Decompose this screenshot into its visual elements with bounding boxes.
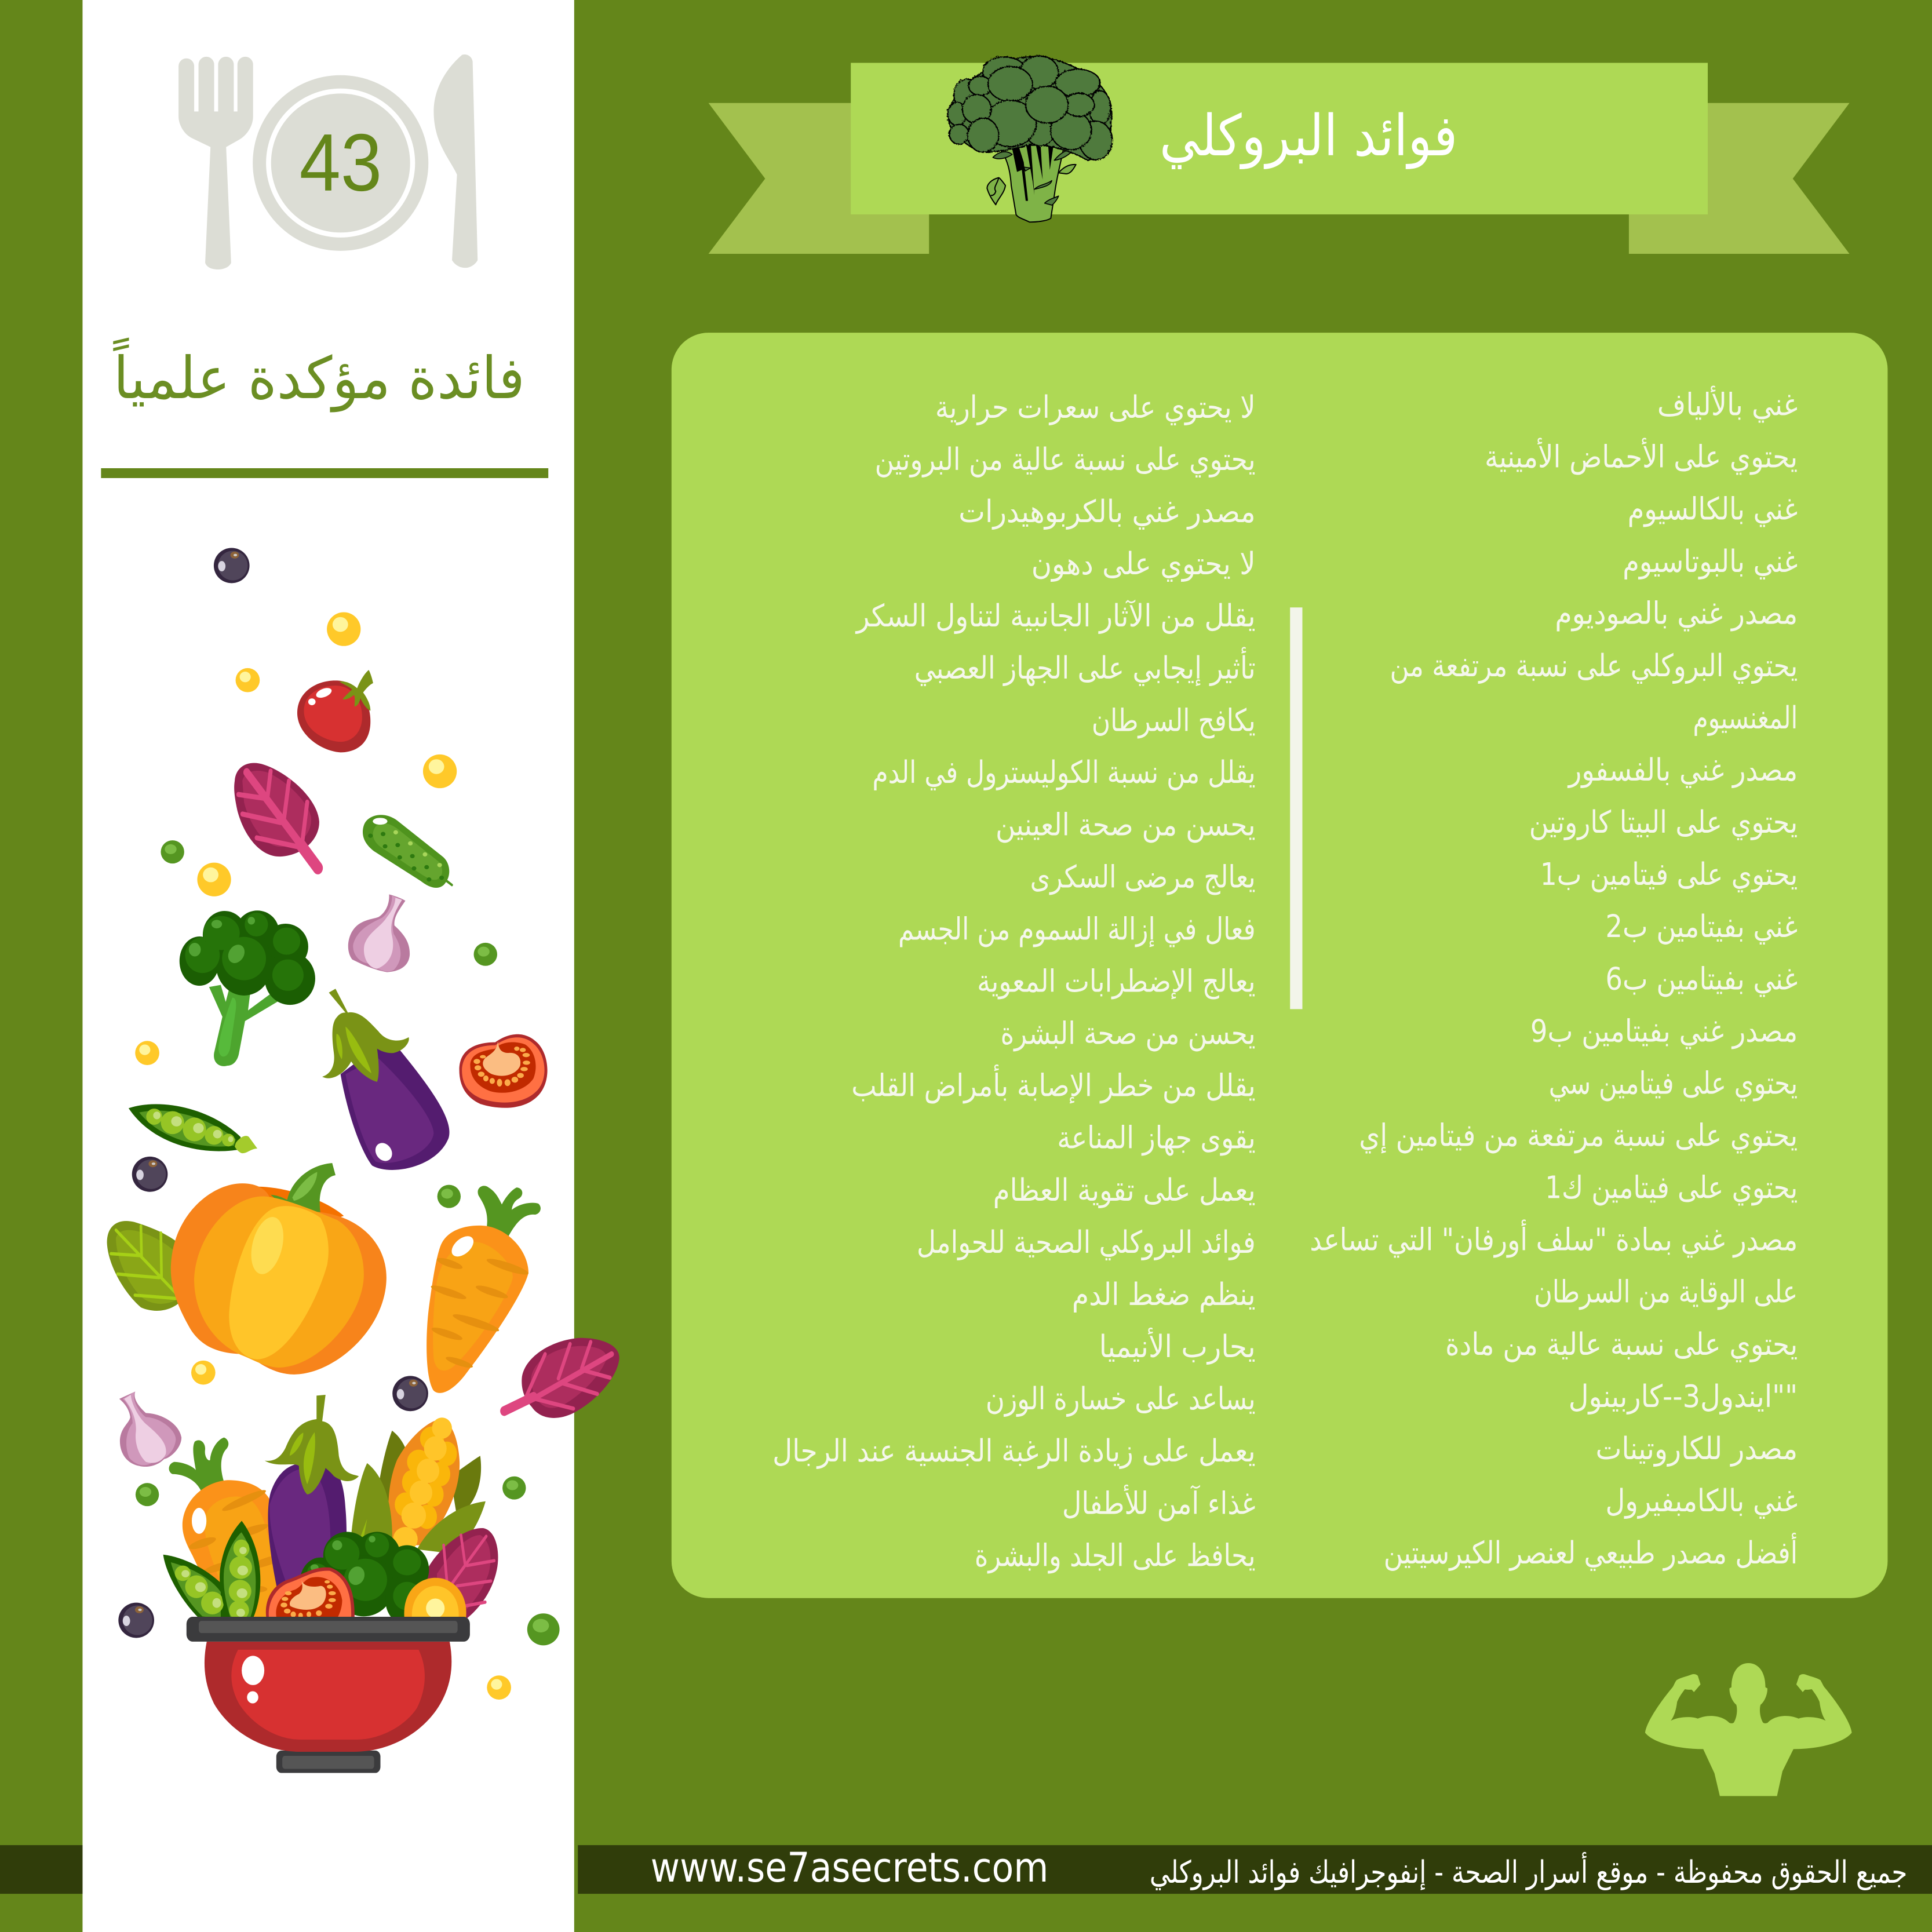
nutrient line: يحتوي على فيتامين سي xyxy=(1549,1065,1798,1101)
olive xyxy=(132,1157,167,1192)
yellow pea xyxy=(135,1041,159,1065)
number 43: 43 xyxy=(300,117,382,208)
nutrient line: مصدر للكاروتينات xyxy=(1596,1431,1798,1467)
benefit line: يعالج الإضطرابات المعوية xyxy=(977,964,1256,1000)
left heading: فائدة مؤكدة علمياً xyxy=(113,337,525,412)
footer band left xyxy=(0,1845,82,1894)
icon: muscleman xyxy=(1645,1663,1852,1796)
pea pod in bowl front xyxy=(220,1521,260,1620)
benefit line: فوائد البروكلي الصحية للحوامل xyxy=(917,1224,1256,1260)
cucumber xyxy=(363,815,452,888)
garlic xyxy=(348,894,410,972)
garlic left xyxy=(119,1391,181,1467)
nutrient line: غني بفيتامين ب6 xyxy=(1606,961,1798,997)
nutrient line: غني بفيتامين ب2 xyxy=(1606,909,1798,945)
broccoli stem shading xyxy=(1011,140,1054,201)
tomato xyxy=(297,670,373,752)
text column: nutrients (right) xyxy=(1310,386,1798,1571)
broccoli in bowl xyxy=(300,1532,429,1624)
benefit line: تأثير إيجابي على الجهاز العصبي xyxy=(914,647,1256,686)
ribbon tail right xyxy=(1629,103,1850,254)
icon: fork xyxy=(178,57,253,269)
benefit line: يساعد على خسارة الوزن xyxy=(986,1381,1256,1417)
nutrient line: المغنسيوم xyxy=(1693,700,1798,736)
benefit line: يقوى جهاز المناعة xyxy=(1057,1120,1256,1156)
olive xyxy=(214,548,250,583)
nutrient line: مصدر غني بالصوديوم xyxy=(1555,596,1798,632)
carrot xyxy=(427,1186,541,1393)
benefit line: مصدر غني بالكربوهيدرات xyxy=(958,494,1256,530)
broccoli floret xyxy=(180,910,315,1066)
green leaf xyxy=(107,1221,181,1311)
white side column xyxy=(82,0,574,1932)
yellow squash in bowl xyxy=(404,1578,466,1618)
nutrient line: يحتوي على فيتامين ب1 xyxy=(1540,856,1798,892)
upper vegetables xyxy=(129,670,548,1170)
main title: فوائد البروكلي xyxy=(1160,103,1457,169)
website url: www.se7asecrets.com xyxy=(651,1844,1048,1891)
carrot in bowl xyxy=(169,1438,294,1618)
yellow pea xyxy=(197,863,231,896)
benefit line: يحتوي على نسبة عالية من البروتين xyxy=(875,442,1256,477)
text column: health benefits (left) xyxy=(772,389,1256,1573)
broccoli florets xyxy=(947,55,1111,159)
benefit line: يعمل على زيادة الرغبة الجنسية عند الرجال xyxy=(772,1433,1256,1469)
green pea xyxy=(161,840,184,863)
benefit line: يعمل على تقوية العظام xyxy=(993,1172,1256,1208)
pea pod xyxy=(129,1104,257,1153)
nutrient line: غني بالبوتاسيوم xyxy=(1623,544,1798,579)
nutrient line: مصدر غني بالفسفور xyxy=(1567,752,1798,788)
icon: broccoli xyxy=(947,55,1111,222)
benefit line: يقلل من خطر الإصابة بأمراض القلب xyxy=(851,1065,1256,1104)
nutrient line: غني بالألياف xyxy=(1657,386,1798,423)
olive xyxy=(392,1376,428,1411)
ribbon tail left xyxy=(709,103,929,254)
icon: plate xyxy=(253,75,428,251)
column divider xyxy=(1290,607,1302,1009)
nutrient line: يحتوي على نسبة مرتفعة من فيتامين إي xyxy=(1359,1117,1798,1153)
icon: plate with fork and knife xyxy=(178,54,477,269)
benefit line: ينظم ضغط الدم xyxy=(1072,1277,1256,1313)
green pea xyxy=(474,943,497,966)
benefit line: يحافظ على الجلد والبشرة xyxy=(975,1537,1256,1573)
benefit line: يحسن من صحة البشرة xyxy=(1001,1016,1256,1052)
nutrient line: ""ايندول3--كاربينول xyxy=(1569,1379,1798,1415)
broccoli stem xyxy=(987,145,1076,222)
yellow pea xyxy=(191,1361,216,1385)
nutrient line: أفضل مصدر طبيعي لعنصر الكيرسيتين xyxy=(1384,1533,1798,1571)
benefit line: يحسن من صحة العينين xyxy=(996,807,1256,843)
pink leaf in bowl xyxy=(427,1528,498,1618)
footer band right xyxy=(578,1845,1932,1894)
green pea xyxy=(136,1483,159,1506)
yellow pea xyxy=(487,1675,511,1700)
benefit line: لا يحتوي على دهون xyxy=(1031,546,1256,582)
illustration: falling vegetables into bowl xyxy=(107,548,619,1773)
benefit line: يكافح السرطان xyxy=(1092,702,1256,738)
nutrient line: مصدر غني بفيتامين ب9 xyxy=(1530,1013,1798,1049)
benefit line: يقلل من الآثار الجانبية لتناول السكر xyxy=(855,598,1256,634)
ribbon banner xyxy=(709,63,1850,254)
benefit line: يعالج مرضى السكرى xyxy=(1030,859,1256,895)
nutrient line: غني بالكالسيوم xyxy=(1628,491,1798,527)
yellow pea xyxy=(327,613,360,646)
pumpkin xyxy=(171,1163,387,1375)
nutrient line: غني بالكامبفيرول xyxy=(1606,1483,1798,1519)
lower vegetables and bowl xyxy=(107,1163,619,1773)
ribbon front xyxy=(851,63,1708,214)
broccoli stem leaves xyxy=(993,149,1074,205)
yellow pea xyxy=(236,668,260,692)
heading underline xyxy=(101,468,548,478)
corn xyxy=(351,1417,486,1554)
icon: knife xyxy=(433,54,477,268)
benefit line: فعال في إزالة السموم من الجسم xyxy=(898,911,1256,947)
green pea xyxy=(438,1185,461,1208)
nutrient line: يحتوي البروكلي على نسبة مرتفعة من xyxy=(1390,648,1798,684)
pink leaf right xyxy=(504,1338,619,1418)
panel: benefits list xyxy=(672,333,1887,1598)
olive xyxy=(118,1603,154,1638)
red bowl xyxy=(187,1617,470,1773)
nutrient line: يحتوي على فيتامين ك1 xyxy=(1545,1170,1798,1206)
green pea xyxy=(502,1477,526,1500)
nutrient line: يحتوي على نسبة عالية من مادة xyxy=(1445,1326,1798,1362)
benefit line: يحارب الأنيميا xyxy=(1099,1328,1256,1365)
benefit line: لا يحتوي على سعرات حرارية xyxy=(935,389,1256,425)
nutrient line: يحتوي على الأحماض الأمينية xyxy=(1485,438,1798,475)
nutrient line: على الوقاية من السرطان xyxy=(1534,1274,1798,1310)
eggplant xyxy=(322,989,449,1170)
yellow pea xyxy=(423,754,457,788)
tomato slice xyxy=(460,1034,548,1108)
eggplant in bowl xyxy=(265,1395,359,1618)
benefit line: غذاء آمن للأطفال xyxy=(1062,1484,1256,1521)
nutrient line: مصدر غني بمادة "سلف أورفان" التي تساعد xyxy=(1310,1220,1798,1258)
benefit line: يقلل من نسبة الكوليسترول في الدم xyxy=(872,754,1256,790)
pink leaf xyxy=(234,763,319,868)
pea pod in bowl left xyxy=(163,1555,227,1618)
green pea large xyxy=(527,1613,560,1645)
nutrient line: يحتوي على البيتا كاروتين xyxy=(1529,804,1798,840)
tomato slice in bowl xyxy=(266,1568,355,1618)
